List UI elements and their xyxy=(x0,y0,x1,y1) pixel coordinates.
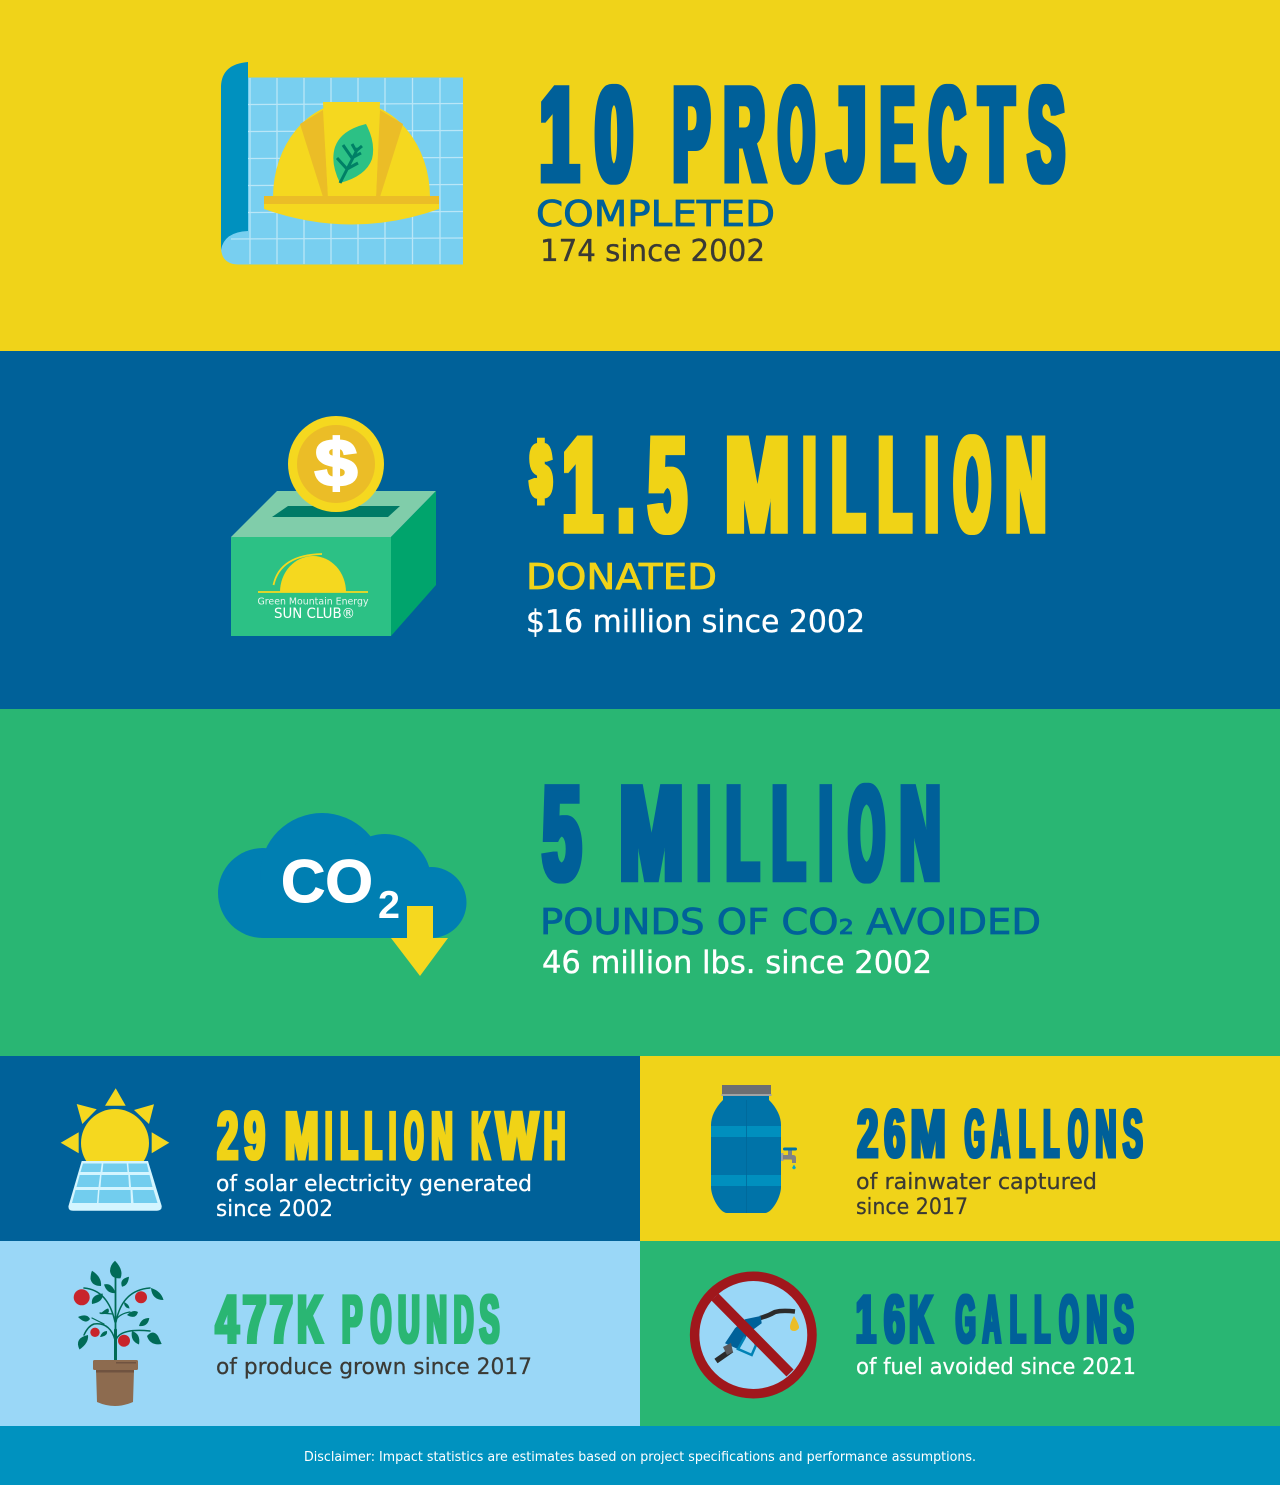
heading: 26m gallons: 2 xyxy=(857,1096,878,1172)
heading: 477k pounds: O xyxy=(371,1282,391,1358)
icon: sun over solar panel xyxy=(61,1088,169,1211)
heading: 26m gallons: O xyxy=(1068,1096,1088,1172)
heading: 477k pounds: N xyxy=(427,1282,447,1358)
icon: co2 cloud with down arrow xyxy=(218,813,466,976)
heading: 29 million kwh: 9 xyxy=(244,1098,265,1174)
heading: 29 million kwh: I xyxy=(325,1098,332,1174)
heading: 29 million kwh: N xyxy=(431,1098,453,1174)
heading: 10 projects: 1 xyxy=(540,60,579,210)
heading: $1.5 million: 1 xyxy=(563,411,602,560)
heading: $1.5 million: L xyxy=(878,411,911,560)
heading: 26m gallons: M xyxy=(911,1096,946,1172)
text: of fuel avoided since 2021: of fuel avoided since 2021 xyxy=(856,1354,1136,1380)
text: 174 since 2002: 174 since 2002 xyxy=(540,234,765,269)
heading: 10 projects: J xyxy=(828,60,866,210)
heading: 5 million: I xyxy=(820,759,832,908)
text: of rainwater captured: since 2017 xyxy=(856,1194,968,1220)
heading: 10 projects: 0 xyxy=(595,60,633,210)
panel: co2 avoided xyxy=(0,709,1280,1056)
heading: 29 million kwh: O xyxy=(404,1098,423,1174)
panel: projects completed xyxy=(0,0,1280,351)
heading: 16k gallons: O xyxy=(1059,1282,1079,1358)
heading: 5 million: 5 xyxy=(543,759,581,908)
icon: co2 cloud with down arrow: 2 xyxy=(378,884,400,927)
icon: no fuel pump nozzle sign xyxy=(695,1276,812,1394)
heading: 10 projects: C xyxy=(929,60,965,210)
heading: 29 million kwh: K xyxy=(471,1098,490,1174)
text: of solar electricity generated: since 2002 xyxy=(216,1196,333,1222)
heading: 477k pounds: K xyxy=(297,1282,322,1358)
heading: 29 million kwh: I xyxy=(389,1098,396,1174)
panel: co2 avoided: N xyxy=(900,759,940,908)
icon: donation box with coin: Green Mountain Energy xyxy=(258,596,369,608)
heading: 477k pounds: 7 xyxy=(243,1282,266,1358)
heading: 16k gallons: G xyxy=(956,1282,976,1358)
heading: 26m gallons: 6 xyxy=(884,1096,905,1172)
label: donated: DONATED xyxy=(526,557,717,598)
panel: donated xyxy=(0,351,1280,709)
heading: 26m gallons: A xyxy=(992,1096,1010,1172)
heading: 10 projects: R xyxy=(724,60,765,210)
heading: $1.5 million: O xyxy=(954,411,990,560)
heading: 16k gallons: K xyxy=(909,1282,933,1358)
heading: 26m gallons: N xyxy=(1095,1096,1116,1172)
heading: $1.5 million: $ xyxy=(531,427,551,515)
text: of solar electricity generated: of solar electricity generated xyxy=(216,1171,532,1197)
heading: 16k gallons: A xyxy=(983,1282,1001,1358)
panel: fuel avoided xyxy=(640,1241,1280,1426)
heading: 477k pounds: U xyxy=(398,1282,420,1358)
heading: 477k pounds: 7 xyxy=(270,1282,293,1358)
heading: $1.5 million: I xyxy=(803,411,816,560)
icon: rain barrel with tap xyxy=(711,1085,797,1213)
panel: rainwater xyxy=(640,1056,1280,1241)
heading: 16k gallons: 6 xyxy=(884,1282,905,1358)
heading: 29 million kwh: 2 xyxy=(217,1098,238,1174)
heading: 26m gallons: G xyxy=(965,1096,985,1172)
heading: 16k gallons: L xyxy=(1010,1282,1026,1358)
heading: 10 projects: P xyxy=(673,60,710,210)
text: of rainwater captured: of rainwater captured xyxy=(856,1169,1097,1195)
text: of rainwater captured xyxy=(856,1169,1097,1220)
icon: co2 cloud with down arrow: CO xyxy=(281,848,373,915)
panel: produce: S xyxy=(480,1282,499,1358)
icon: donation box with coin: SUN CLUB® xyxy=(274,606,355,622)
heading: 16k gallons: 1 xyxy=(856,1282,876,1358)
text: 46 million lbs since 2002: 46 million lbs. since 2002 xyxy=(542,945,932,981)
heading: 5 million: L xyxy=(772,759,805,908)
footer: disclaimer: Disclaimer: Impact statistics are estimates based on project specifications and performance assumptions. xyxy=(304,1450,976,1465)
heading: 10 projects: T xyxy=(979,60,1014,210)
heading: 16k gallons: L xyxy=(1034,1282,1050,1358)
heading: $1.5 million: . xyxy=(618,411,634,560)
text: of solar electricity generated xyxy=(216,1171,532,1222)
heading: $1.5 million: I xyxy=(926,411,938,560)
heading: 477k pounds: P xyxy=(342,1282,362,1358)
label: completed: COMPLETED xyxy=(536,194,775,235)
panel: fuel avoided: S xyxy=(1114,1282,1134,1358)
heading: 5 million: I xyxy=(698,759,710,908)
heading: 10 projects: O xyxy=(779,60,814,210)
panel: solar electricity: H xyxy=(544,1098,565,1174)
icon: donation box with coin: $ xyxy=(315,426,357,500)
heading: 10 projects: E xyxy=(880,60,914,210)
heading: 29 million kwh: L xyxy=(364,1098,382,1174)
icon: hard hat on blueprint xyxy=(221,62,463,264)
label: pounds of co2 avoided: POUNDS OF CO₂ AVOIDED xyxy=(540,902,1041,943)
heading: 29 million kwh: L xyxy=(340,1098,358,1174)
heading: 477k pounds: D xyxy=(454,1282,473,1358)
heading: $1.5 million: 5 xyxy=(649,411,686,560)
heading: 5 million: O xyxy=(849,759,884,908)
heading: 5 million: M xyxy=(620,759,683,908)
icon: donation box with coin xyxy=(231,416,436,636)
panel: solar electricity xyxy=(0,1056,640,1241)
heading: 16k gallons: N xyxy=(1086,1282,1107,1358)
heading: 5 million: L xyxy=(726,759,759,908)
panel: projects completed: S xyxy=(1028,60,1064,210)
panel: donated: N xyxy=(1006,411,1046,560)
heading: 26m gallons: L xyxy=(1019,1096,1035,1172)
heading: 29 million kwh: M xyxy=(285,1098,318,1174)
panel: produce xyxy=(0,1241,640,1426)
heading: 477k pounds: 4 xyxy=(216,1282,239,1358)
text: of produce grown since 2017: of produce grown since 2017 xyxy=(216,1354,532,1380)
text: $16 million since 2002: $16 million since 2002 xyxy=(526,604,865,640)
heading: $1.5 million: L xyxy=(832,411,865,560)
icon: tomato plant in pot xyxy=(74,1261,164,1406)
panel: rainwater: S xyxy=(1123,1096,1143,1172)
footer: disclaimer xyxy=(0,1426,1280,1485)
heading: 26m gallons: L xyxy=(1043,1096,1059,1172)
heading: 29 million kwh: W xyxy=(496,1098,539,1174)
heading: $1.5 million: M xyxy=(726,411,789,560)
